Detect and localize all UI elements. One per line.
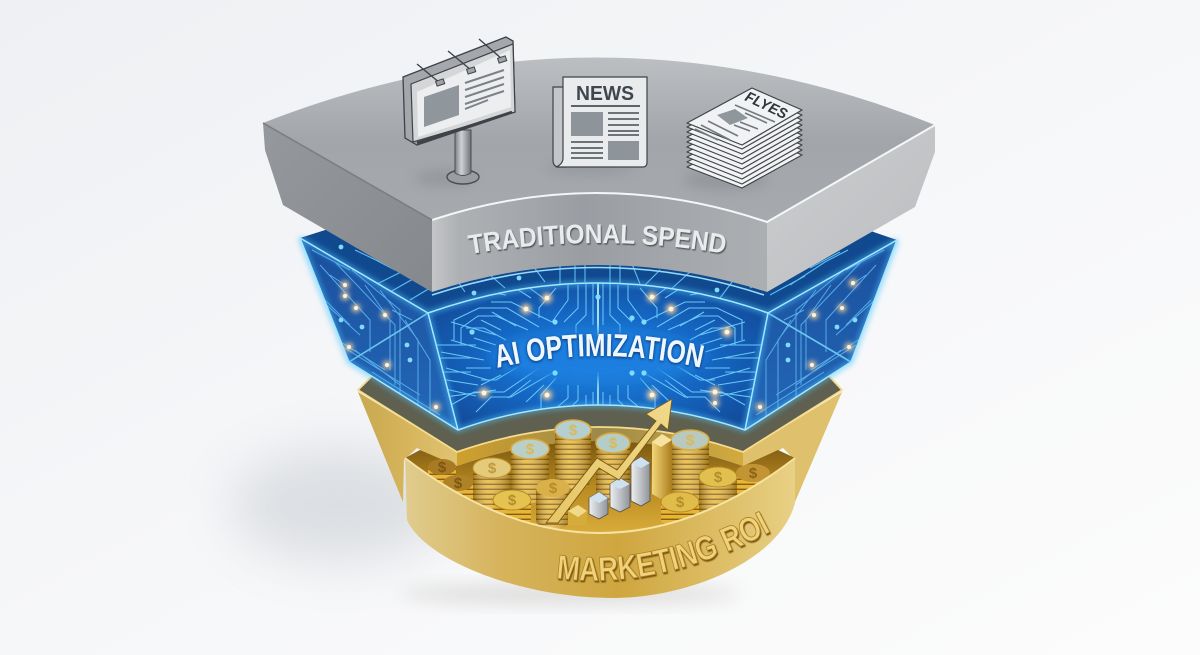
glowing edges: [300, 238, 897, 430]
coin stacks: $: [526, 441, 535, 458]
front face: [428, 283, 768, 430]
coin stacks: $: [488, 460, 497, 477]
left face: [300, 238, 458, 430]
circuit traces on left face: [310, 250, 440, 420]
coin stacks: $: [508, 492, 517, 509]
coin stacks: [428, 420, 770, 530]
coin stacks: $: [549, 480, 558, 497]
layer: marketing ROI gold bowl back: [358, 376, 842, 502]
interior wall: [405, 441, 795, 533]
icon: newspaper: NEWS: [576, 83, 634, 105]
label: MARKETING ROI: MARKETING ROI: [557, 511, 772, 584]
drop shadows: [230, 447, 740, 604]
right face: [745, 240, 897, 430]
coin stacks: $: [438, 459, 447, 476]
bevel highlights: [432, 125, 935, 222]
traces on back strip: [355, 250, 848, 300]
coin stacks: $: [749, 465, 758, 482]
front face: [432, 193, 767, 292]
right side face: [767, 125, 935, 292]
layer: AI optimization glass block: [296, 230, 902, 436]
icon shadows: [415, 162, 767, 190]
coin stacks: $: [714, 469, 723, 486]
circuit traces on right face: [756, 250, 886, 420]
label: TRADITIONAL SPEND: TRADITIONAL SPEND: [467, 224, 727, 255]
coin stacks: $: [676, 494, 685, 511]
top face: [263, 57, 935, 222]
circuit traces on front: [436, 284, 761, 412]
coin stacks: $: [454, 475, 463, 492]
icon: rising arrow: [546, 399, 672, 523]
label: AI OPTIMIZATION: AI OPTIMIZATION: [496, 332, 706, 370]
bowl interior with coins: [405, 399, 795, 533]
left side face: [263, 123, 432, 292]
coin stacks: $: [686, 432, 695, 449]
icon: flyers stack: FLYES: [742, 89, 790, 123]
layer: traditional spend grey slab: [262, 58, 935, 292]
layer: marketing ROI front band: [404, 457, 796, 598]
coin stacks: $: [569, 422, 578, 439]
glowing nodes: [339, 245, 857, 411]
back strip: [300, 200, 897, 313]
icon: flyers stack: [687, 88, 802, 188]
bar chart: [568, 434, 672, 525]
icon: newspaper: [553, 77, 647, 167]
center plate behind label: [490, 332, 706, 380]
icon: billboard: [403, 37, 515, 184]
coin stacks: $: [609, 435, 618, 452]
